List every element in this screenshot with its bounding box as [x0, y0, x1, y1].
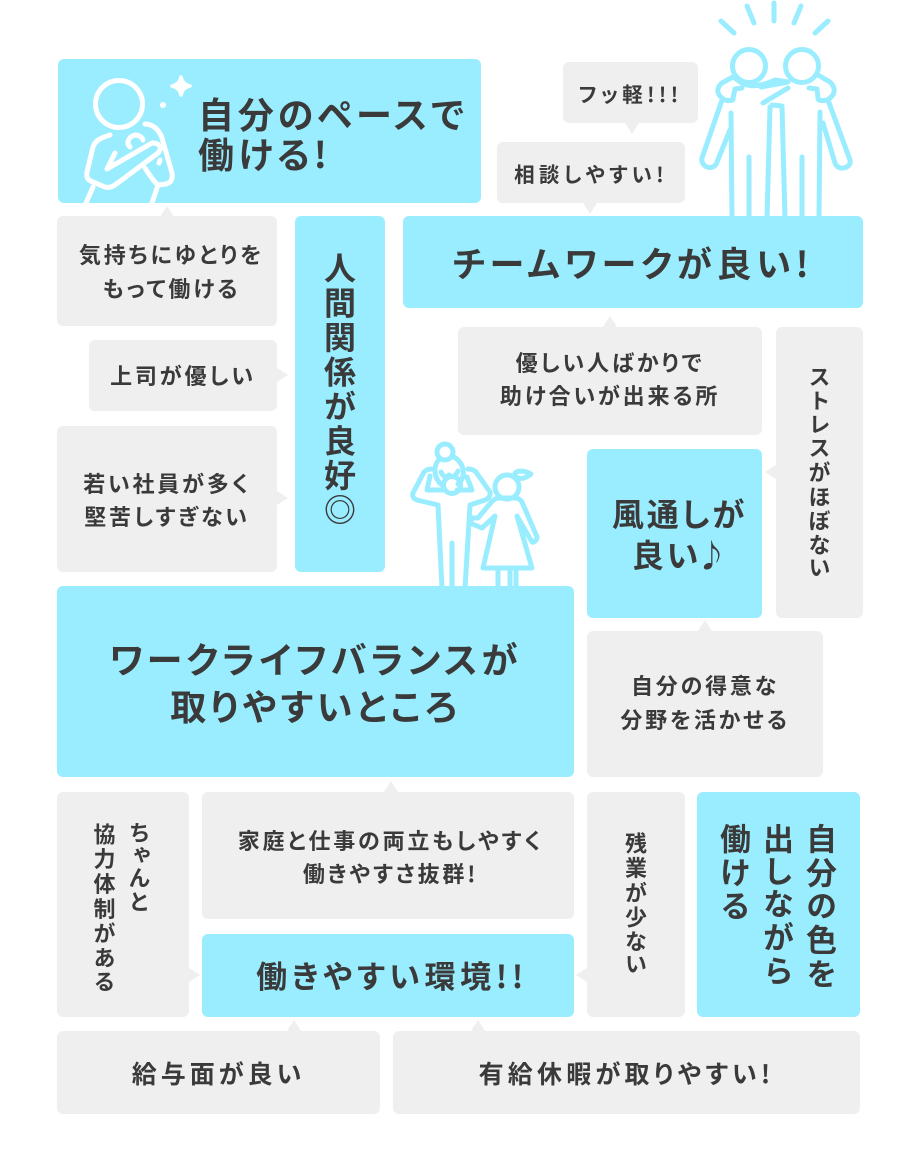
- text box: many young employees: 若い社員が多く: [83, 467, 251, 499]
- arrow: no stress to open communication: [765, 465, 776, 479]
- text box: little overtime: [587, 792, 685, 1017]
- arrow: kind boss to relationships: [277, 368, 288, 382]
- text box: many young employees: 堅苦しすぎない: [84, 500, 250, 532]
- panel: easy-to-work environment: [202, 934, 574, 1017]
- text box: light footwork: [563, 62, 698, 123]
- text box: use your strengths: 自分の得意な: [631, 668, 779, 700]
- arrow: kind people to teamwork: [603, 316, 617, 327]
- arrow: young employees to relationships: [277, 491, 288, 505]
- text box: kind people helping each other: 助け合いが出来る所: [500, 378, 720, 410]
- text box: easy paid leave: [393, 1031, 860, 1114]
- arrow: salary to environment: [287, 1020, 301, 1031]
- text box: kind people helping each other: 優しい人ばかりで: [516, 346, 704, 378]
- text box: kind boss: 上司が優しい: [110, 358, 256, 390]
- text box: balancing home and work: [202, 792, 574, 919]
- arrow: easy to consult: [583, 203, 597, 214]
- text box: proper cooperation: 協力体制がある: [88, 823, 120, 995]
- text box: proper cooperation: [57, 792, 189, 1017]
- text box: good salary: 給与面が良い: [132, 1054, 305, 1090]
- text box: balancing home and work: 働きやすさ抜群!: [303, 856, 478, 888]
- panel: good teamwork: チームワークが良い!: [453, 237, 813, 288]
- text box: kind people helping each other: [458, 327, 762, 435]
- panel: work while being yourself: 自分の色を: [799, 823, 844, 993]
- panel: work at own pace: 働ける!: [198, 126, 331, 178]
- text box: many young employees: [57, 426, 277, 572]
- icon: two people shoulder to shoulder: [699, 0, 853, 216]
- text box: good salary: [57, 1031, 380, 1114]
- text box: balancing home and work: 家庭と仕事の両立もしやすく: [238, 824, 543, 856]
- text box: relaxed work: 気持ちにゆとりを: [79, 238, 264, 270]
- panel: work-life balance: ワークライフバランスが: [110, 632, 521, 684]
- text box: kind boss: [89, 340, 277, 411]
- text box: relaxed work: もって働ける: [103, 272, 240, 304]
- arrow: light footwork: [625, 123, 639, 134]
- text box: relaxed work: [57, 216, 277, 326]
- panel: work at own pace: [58, 59, 481, 203]
- arrow: calm feeling to pace: [160, 206, 174, 217]
- icon: family with child on shoulders: [410, 442, 540, 586]
- arrow: overtime to environment: [576, 968, 587, 982]
- panel: work while being yourself: [697, 792, 860, 1017]
- text box: almost no stress: [776, 327, 863, 618]
- arrow: paid leave to environment: [471, 1020, 485, 1031]
- text box: light footwork: フッ軽!!!: [579, 78, 682, 108]
- panel: easy-to-work environment: 働きやすい環境!!: [256, 952, 528, 997]
- panel: good teamwork: [403, 216, 863, 308]
- panel: work while being yourself: 出しながら: [756, 823, 801, 989]
- arrow: cooperation to environment: [189, 968, 200, 982]
- panel: work while being yourself: 働ける: [713, 823, 758, 924]
- panel: work-life balance: [57, 586, 574, 777]
- panel: work-life balance: 取りやすいところ: [170, 678, 461, 730]
- panel: work at own pace: 自分のペースで: [198, 86, 468, 138]
- text box: easy paid leave: 有給休暇が取りやすい!: [479, 1054, 774, 1090]
- text box: easy to consult: [497, 142, 685, 203]
- panel: open communication: 風通しが: [612, 490, 747, 536]
- icon: person hugging self: [84, 75, 192, 203]
- text box: little overtime: 残業が少ない: [620, 832, 652, 977]
- text box: use your strengths: 分野を活かせる: [620, 702, 790, 734]
- panel: open communication: [587, 449, 762, 618]
- text box: proper cooperation: ちゃんと: [124, 823, 156, 915]
- text box: almost no stress: ストレスがほぼない: [804, 366, 836, 579]
- panel: good relationships: 人間関係が良好◎: [317, 252, 363, 528]
- panel: open communication: 良い♪: [632, 530, 727, 576]
- text box: easy to consult: 相談しやすい!: [514, 158, 668, 188]
- panel: good relationships: [295, 216, 385, 572]
- arrow: strengths to communication: [698, 620, 712, 631]
- arrow: home and work to balance: [384, 781, 398, 792]
- text box: use your strengths: [587, 631, 823, 777]
